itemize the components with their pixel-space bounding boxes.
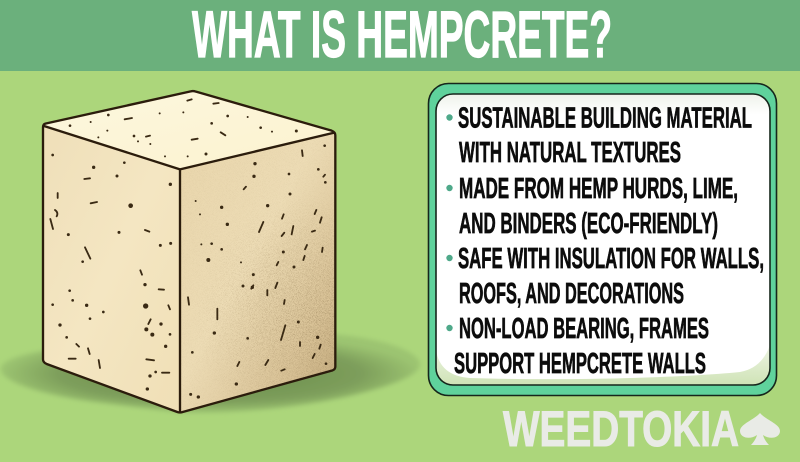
block top face (43, 91, 335, 169)
panel green frame (428, 84, 776, 396)
bullet points (446, 114, 453, 331)
hempcrete block illustration (1, 91, 420, 413)
brand logo (503, 401, 780, 457)
panel inset bottom sheen (436, 345, 770, 385)
panel white inset (436, 94, 770, 385)
block ground shadow (1, 334, 420, 413)
block fibres (50, 99, 325, 373)
icon: spade (740, 413, 780, 445)
block outline (43, 91, 335, 412)
brand wordmark: WEEDTOKIA (503, 401, 739, 457)
bullet text (454, 102, 764, 380)
block right face (180, 133, 335, 413)
header band (0, 0, 800, 71)
block left face (43, 125, 180, 413)
info panel (428, 84, 776, 396)
block speckles (51, 111, 327, 399)
grain on right face (180, 133, 335, 413)
panel inset outline (436, 94, 770, 385)
